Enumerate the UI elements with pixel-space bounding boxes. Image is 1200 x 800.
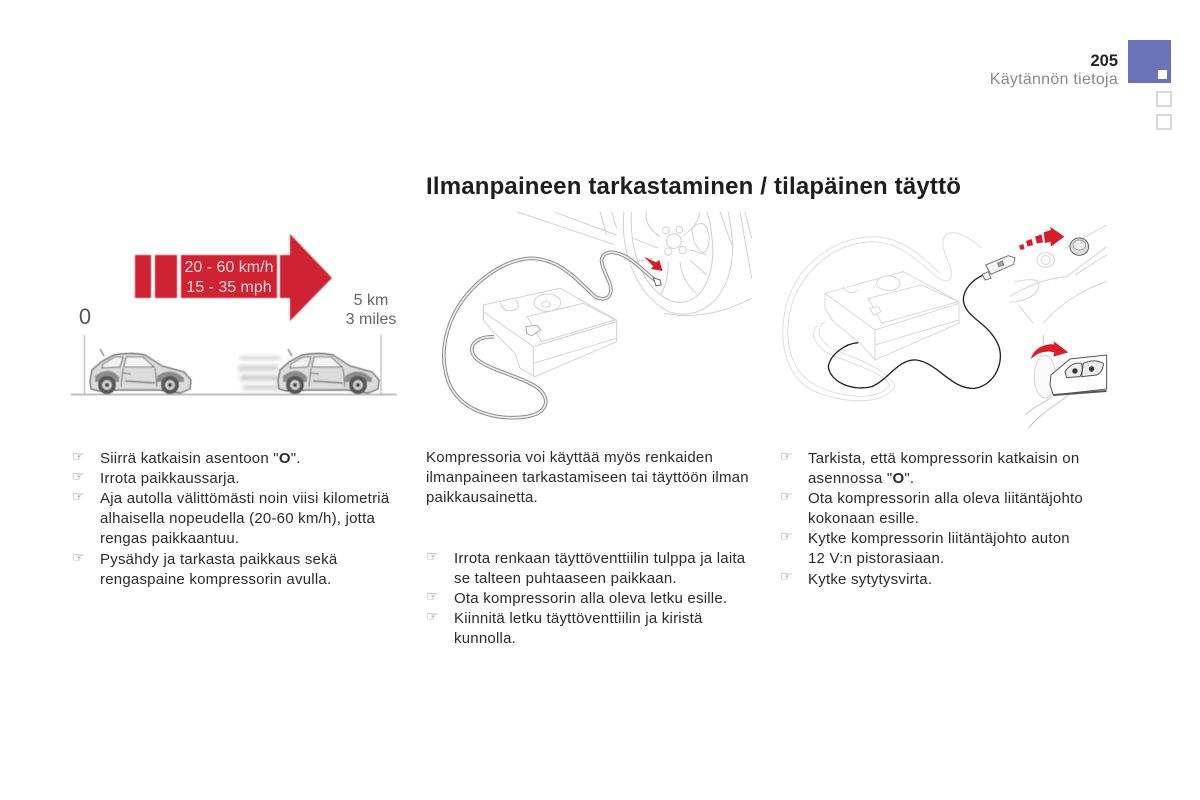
bullet list: ☞ — [426, 549, 439, 565]
right column instructions: asennossa "O". — [808, 470, 914, 487]
right column instructions: kokonaan esille. — [808, 510, 919, 527]
centre column instructions: ☞ — [426, 589, 439, 605]
left column instructions: ☞ — [72, 469, 85, 485]
motion blur — [238, 356, 280, 390]
left column instructions: alhaisella nopeudella (20-60 km/h), jotta — [100, 510, 375, 527]
speed label: 15 - 35 mph — [186, 279, 272, 296]
red pointer arrow — [644, 257, 663, 271]
centre column intro text: ilmanpaineen tarkastamiseen tai täyttöön ilman — [426, 469, 749, 486]
ignition key and switch — [1050, 355, 1107, 395]
car at start — [90, 349, 191, 394]
centre column instructions: ☞ — [426, 609, 439, 625]
right column instructions: ☞ — [780, 569, 793, 585]
centre column intro text: Kompressoria voi käyttää myös renkaiden — [426, 449, 713, 466]
bullet list: ☞ — [72, 449, 85, 465]
right column instructions: ☞ — [780, 489, 793, 505]
curved red arrow — [1031, 341, 1068, 359]
power cable — [828, 275, 1000, 388]
speed arrow — [135, 234, 332, 321]
centre column intro text: paikkausainetta. — [426, 489, 538, 506]
left column instructions: rengaspaine kompressorin avulla. — [100, 571, 331, 588]
left column instructions: Pysähdy ja tarkasta paikkaus sekä — [100, 551, 337, 568]
bullet list: ☞ — [780, 449, 793, 465]
compressor body — [825, 272, 959, 360]
page number: 205 — [1090, 52, 1118, 70]
right column instructions: Kytke kompressorin liitäntäjohto auton — [808, 530, 1070, 547]
right column instructions: Kytke sytytysvirta. — [808, 571, 932, 588]
left column instructions: Aja autolla välittömästi noin viisi kilometriä — [100, 490, 389, 507]
wheel and car body — [517, 212, 752, 316]
left column instructions: rengas paikkaantuu. — [100, 530, 239, 547]
compressor body — [483, 288, 617, 377]
distance label: 3 miles — [346, 311, 396, 328]
left column instructions — [72, 449, 390, 588]
air hose — [444, 252, 655, 418]
right column instructions: 12 V:n pistorasiaan. — [808, 550, 944, 567]
distance label: 5 km — [354, 292, 388, 309]
page number and section title — [990, 52, 1118, 88]
12 V plug — [982, 256, 1015, 280]
left column instructions: Siirrä katkaisin asentoon "O". — [100, 450, 301, 467]
centre column intro text — [426, 449, 749, 506]
speed label: 20 - 60 km/h — [185, 259, 273, 276]
right column instructions — [780, 449, 1083, 588]
active tab — [1128, 40, 1171, 83]
centre column instructions: kunnolla. — [454, 630, 516, 647]
valve connector — [653, 278, 661, 286]
chapter navigation tabs — [1128, 40, 1172, 130]
socket and dashboard — [1010, 225, 1107, 323]
left column instructions: ☞ — [72, 550, 85, 566]
right column instructions: Ota kompressorin alla oleva liitäntäjohto — [808, 490, 1083, 507]
car at finish — [278, 349, 379, 394]
right column instructions: Tarkista, että kompressorin katkaisin on — [808, 450, 1079, 467]
section title: Käytännön tietoja — [990, 71, 1118, 88]
inactive tab — [1156, 114, 1172, 130]
main heading: Ilmanpaineen tarkastaminen / tilapäinen täyttö — [426, 173, 961, 200]
ground and distance markers — [71, 335, 397, 394]
centre column instructions — [426, 549, 746, 647]
right column instructions: ☞ — [780, 529, 793, 545]
centre column instructions: Irrota renkaan täyttöventtiilin tulppa ja laita — [454, 550, 745, 567]
start label: 0 — [79, 304, 91, 329]
centre column instructions: se talteen puhtaaseen paikkaan. — [454, 570, 677, 587]
inactive tab — [1156, 91, 1172, 107]
left column instructions: ☞ — [72, 489, 85, 505]
centre column instructions: Ota kompressorin alla oleva letku esille. — [454, 590, 727, 607]
centre column instructions: Kiinnitä letku täyttöventtiilin ja kiristä — [454, 610, 703, 627]
dashed red arrow — [1019, 227, 1064, 250]
ghosted air hose — [783, 233, 982, 401]
left column instructions: Irrota paikkaussarja. — [100, 470, 240, 487]
ignition switch ring — [1034, 355, 1056, 398]
